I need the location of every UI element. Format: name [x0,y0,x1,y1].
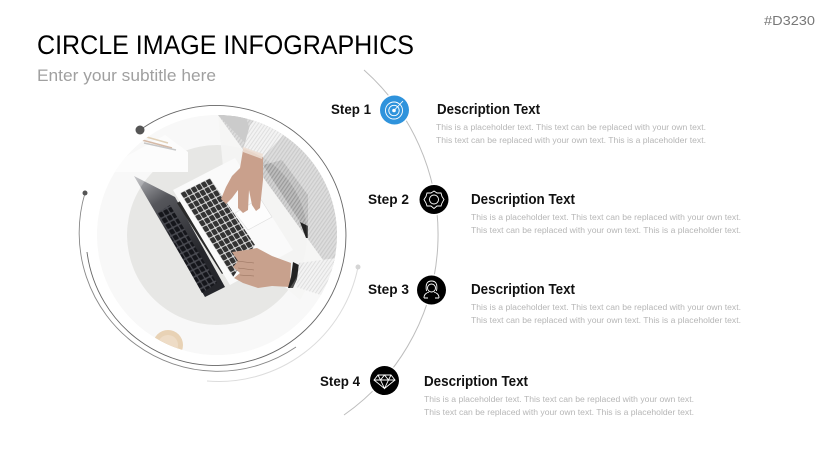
trackpad [235,198,272,230]
step 4 description: This is a placeholder text. This text can be replaced with your own text. [424,394,694,404]
inner ring with dot [87,106,346,366]
step 1 [331,94,706,145]
step 1 description: This text can be replaced with your own text. This is a placeholder text. [436,135,706,145]
step 2 description: Description Text [471,192,575,208]
upper sleeve [244,121,284,157]
pencils [142,136,176,150]
step 1 label: Step 1 [331,101,371,117]
step 4 label: Step 4 [320,373,360,389]
laptop hinge [177,201,223,274]
step 3 description: This text can be replaced with your own text. This is a placeholder text. [471,315,741,325]
step 4 description [424,374,694,417]
step 4 description: This text can be replaced with your own text. This is a placeholder text. [424,407,694,417]
step 3 description: This is a placeholder text. This text can be replaced with your own text. [471,302,741,312]
outer translucent ring [134,115,337,350]
right desk highlight [221,146,306,290]
step 1 description [436,102,706,145]
keyboard [180,178,255,277]
light outer arc with dot [207,264,360,381]
laptop base [173,164,240,285]
desk inner circle [127,145,288,325]
step 2 description [471,192,741,235]
lower hand [232,248,291,288]
subtitle: Enter your subtitle here [37,66,216,85]
icon: diamond [368,364,400,396]
step 1 description: This is a placeholder text. This text can be replaced with your own text. [436,122,706,132]
laptop lid [134,176,225,297]
step 2 description: This text can be replaced with your own text. This is a placeholder text. [471,225,741,235]
step 1 description: Description Text [437,102,540,118]
desk outer tone [90,110,350,360]
lower sleeve [296,258,334,294]
icon: target [378,94,410,126]
main curved timeline [344,70,438,415]
step 3 description: Description Text [471,282,575,298]
coffee cup [155,330,183,350]
upper hand [221,147,263,213]
step 4 description: Description Text [424,374,528,390]
circular photo [127,115,337,350]
shirt [218,115,337,265]
step 2 [368,184,741,235]
middle arc with dot [79,190,296,371]
step 4 [320,364,694,417]
step 3 label: Step 3 [368,281,409,297]
step 3 [368,274,741,325]
watch [288,262,299,288]
step 3 description [471,282,741,325]
shirt shadow [263,160,308,228]
icon: gear [418,184,450,216]
step 2 description: This is a placeholder text. This text can be replaced with your own text. [471,212,741,222]
title: CIRCLE IMAGE INFOGRAPHICS [37,30,414,60]
notebook [153,150,188,172]
step 2 label: Step 2 [368,191,409,207]
reference code: #D3230 [764,13,815,28]
icon: person [416,274,448,306]
